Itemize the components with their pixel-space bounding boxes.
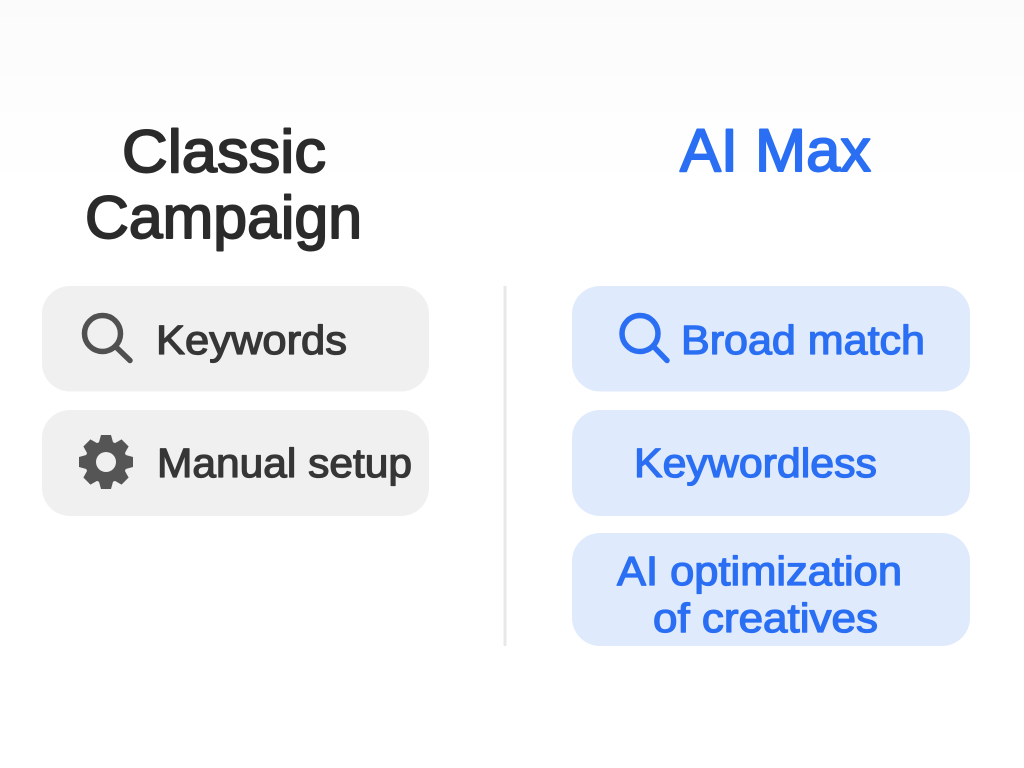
panel: Manual setup (42, 410, 429, 516)
heading: Classic Campaign (85, 118, 362, 251)
panel: Keywords (42, 286, 429, 392)
panel: Keywordless (572, 410, 970, 516)
heading: Classic Campaign: Classic (122, 118, 326, 185)
icon: magnifying glass gray (84, 316, 130, 360)
label: Manual setup: Manual setup (157, 440, 412, 486)
panel: Broad match (572, 286, 970, 392)
heading: AI Max: AI Max (680, 117, 871, 184)
label: AI optimization of creatives: of creatives (653, 595, 878, 641)
label: Keywords: Keywords (156, 317, 347, 363)
heading: Classic Campaign: Campaign (85, 184, 362, 251)
label: Keywordless: Keywordless (634, 440, 877, 486)
column divider (504, 286, 506, 646)
top background fade (0, 0, 1024, 190)
icon: gear (79, 435, 133, 489)
label: AI optimization of creatives: AI optimization (617, 548, 902, 594)
label: AI optimization of creatives (617, 548, 902, 641)
label: Broad match: Broad match (681, 317, 925, 363)
panel: AI optimization of creatives (572, 533, 970, 646)
icon: magnifying glass blue (622, 316, 667, 360)
